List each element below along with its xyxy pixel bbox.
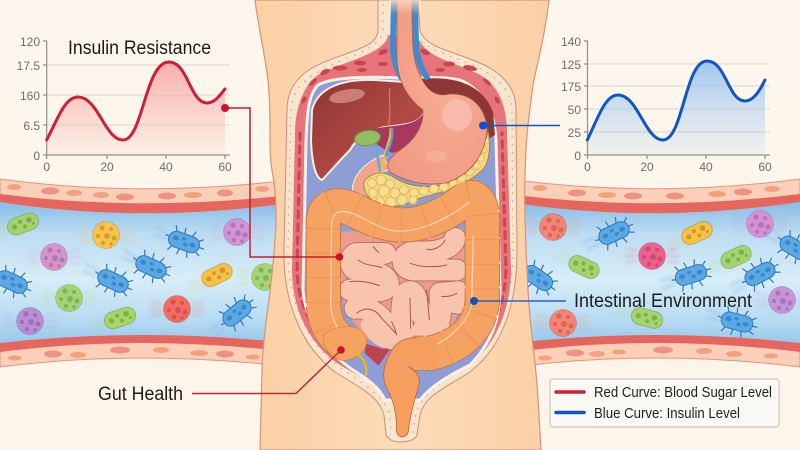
grid lines: [588, 64, 770, 132]
y axis labels: [561, 35, 581, 163]
blue microbe: [78, 255, 138, 303]
intestine creases: [350, 240, 457, 335]
vessel wall cells: [533, 185, 780, 360]
blue microbe: [116, 241, 176, 289]
yellow fat omentum: [364, 130, 489, 207]
blue microbe: [0, 256, 37, 304]
green round microbe: [237, 264, 293, 290]
grid lines: [47, 65, 230, 125]
gallbladder: [354, 129, 381, 147]
legend: [550, 379, 779, 427]
x axis labels: 40: [699, 160, 713, 174]
x axis labels: 20: [100, 160, 114, 174]
stomach highlight: [442, 99, 472, 131]
chart: insulin resistance, red curve: [17, 35, 232, 174]
blue microbe: [203, 289, 262, 344]
y axis labels: [17, 35, 40, 163]
vessel lining top: [0, 194, 290, 213]
legend: blue label: Blue Curve: Insulin Level: [594, 406, 740, 422]
blue microbe: [504, 248, 563, 302]
red round microbe: [525, 214, 581, 240]
legend: red key: [556, 390, 584, 394]
purple round microbe: [754, 286, 800, 314]
liver lower lobe: [362, 112, 424, 153]
liver highlight: [328, 86, 366, 106]
area under red curve: [47, 62, 225, 155]
connector: intestine to Intestinal Environment: [470, 297, 566, 305]
small intestine coils: [350, 238, 458, 340]
abdominal muscle layer: [292, 35, 511, 400]
panel: right blood vessel with gut microbes: [504, 179, 800, 367]
blue microbe: [149, 218, 209, 262]
green round microbe: [41, 284, 97, 312]
x axis labels: 40: [159, 160, 173, 174]
abdominal wall fat layer: [284, 0, 517, 442]
vessel lining top: [515, 194, 800, 213]
vessel wall: [0, 179, 290, 367]
blue curve: [587, 61, 765, 140]
stomach and esophagus: [388, 0, 487, 184]
green rod microbe: [614, 302, 665, 330]
area under blue curve: [587, 61, 765, 155]
dark cavity behind stomach: [420, 78, 495, 140]
stomach fold: [425, 150, 447, 162]
axes: [43, 41, 230, 159]
red round microbe: [535, 310, 591, 336]
y axis labels: 160: [20, 89, 40, 103]
sigmoid colon and rectum: [384, 337, 437, 437]
legend: blue key: [556, 411, 584, 414]
liver: [311, 80, 424, 180]
x axis labels: [43, 160, 232, 174]
connector: Gut Health to cecum: [192, 346, 345, 394]
x axis labels: 20: [640, 160, 654, 174]
pink round microbe: [624, 242, 680, 270]
green rod microbe: [87, 305, 138, 336]
x axis labels: 0: [584, 160, 591, 174]
torso: [255, 0, 549, 450]
y axis labels: 17.5: [17, 59, 40, 73]
blue microbe: [725, 252, 785, 301]
liver duct: [388, 88, 390, 127]
vessel lumen: [515, 202, 800, 343]
vessel wall: [515, 179, 800, 367]
red curve: [47, 62, 225, 140]
dark mesentery: [365, 342, 395, 366]
muscle fibre ovals on the shoulders: [300, 48, 501, 104]
panel: left blood vessel with gut microbes: [0, 179, 293, 367]
axes: [584, 41, 770, 159]
blue microbe: [760, 220, 800, 271]
yellow round microbe: [78, 222, 134, 248]
legend: red label: Red Curve: Blood Sugar Level: [594, 385, 772, 401]
blue microbe: [656, 255, 715, 298]
connector: blue stomach point to blue chart: [479, 122, 560, 130]
panel: abdominal anatomy: [284, 0, 517, 442]
mesentery behind small intestine: [338, 228, 467, 349]
blue vessels along esophagus: [393, 0, 428, 82]
gallbladder and bile ducts: [354, 128, 392, 173]
neck fade over esophagus: [389, 0, 421, 14]
green rod microbe: [703, 243, 754, 278]
chart title: Insulin Resistance: [68, 38, 211, 59]
y axis labels: 140: [561, 35, 581, 49]
large intestine pale taenia line: [331, 202, 473, 348]
y axis labels: 120: [20, 35, 40, 49]
blue microbe: [579, 211, 639, 259]
y axis labels: 6.5: [23, 119, 40, 133]
y axis labels: 0: [574, 149, 581, 163]
yellow rod microbe: [664, 219, 715, 254]
blue microbe: [702, 300, 761, 341]
x axis labels: 0: [43, 160, 50, 174]
x axis labels: [584, 160, 772, 174]
appendix: [355, 352, 366, 375]
purple round microbe: [26, 244, 82, 270]
vessel lumen: [0, 202, 290, 343]
label: Intestinal Environment: Intestinal Environment: [574, 291, 753, 312]
chart: blue curve: [561, 35, 772, 174]
y axis labels: 50: [568, 103, 581, 117]
large intestine: [323, 197, 482, 353]
connector: red chart point to small intestine: [221, 104, 343, 261]
x axis labels: 60: [758, 160, 772, 174]
y axis labels: 125: [561, 58, 581, 72]
vessel wall cells: [7, 184, 269, 360]
duodenum: [352, 155, 390, 208]
label: Gut Health: Gut Health: [98, 384, 183, 405]
vessel lining bottom: [515, 335, 800, 352]
abdominal cavity: [303, 77, 500, 400]
vessel lining bottom: [0, 335, 290, 352]
y axis labels: 25: [568, 126, 581, 140]
green rod microbe: [0, 211, 41, 243]
green rod microbe: [551, 246, 602, 281]
y axis labels: 0: [33, 149, 40, 163]
cecum: [323, 327, 367, 360]
y axis labels: 175: [561, 80, 581, 94]
purple round microbe: [732, 210, 788, 238]
x axis labels: 60: [218, 160, 232, 174]
yellow rod microbe: [184, 261, 235, 296]
red round microbe: [149, 296, 205, 322]
purple round microbe: [209, 218, 265, 246]
purple round microbe: [2, 308, 58, 334]
